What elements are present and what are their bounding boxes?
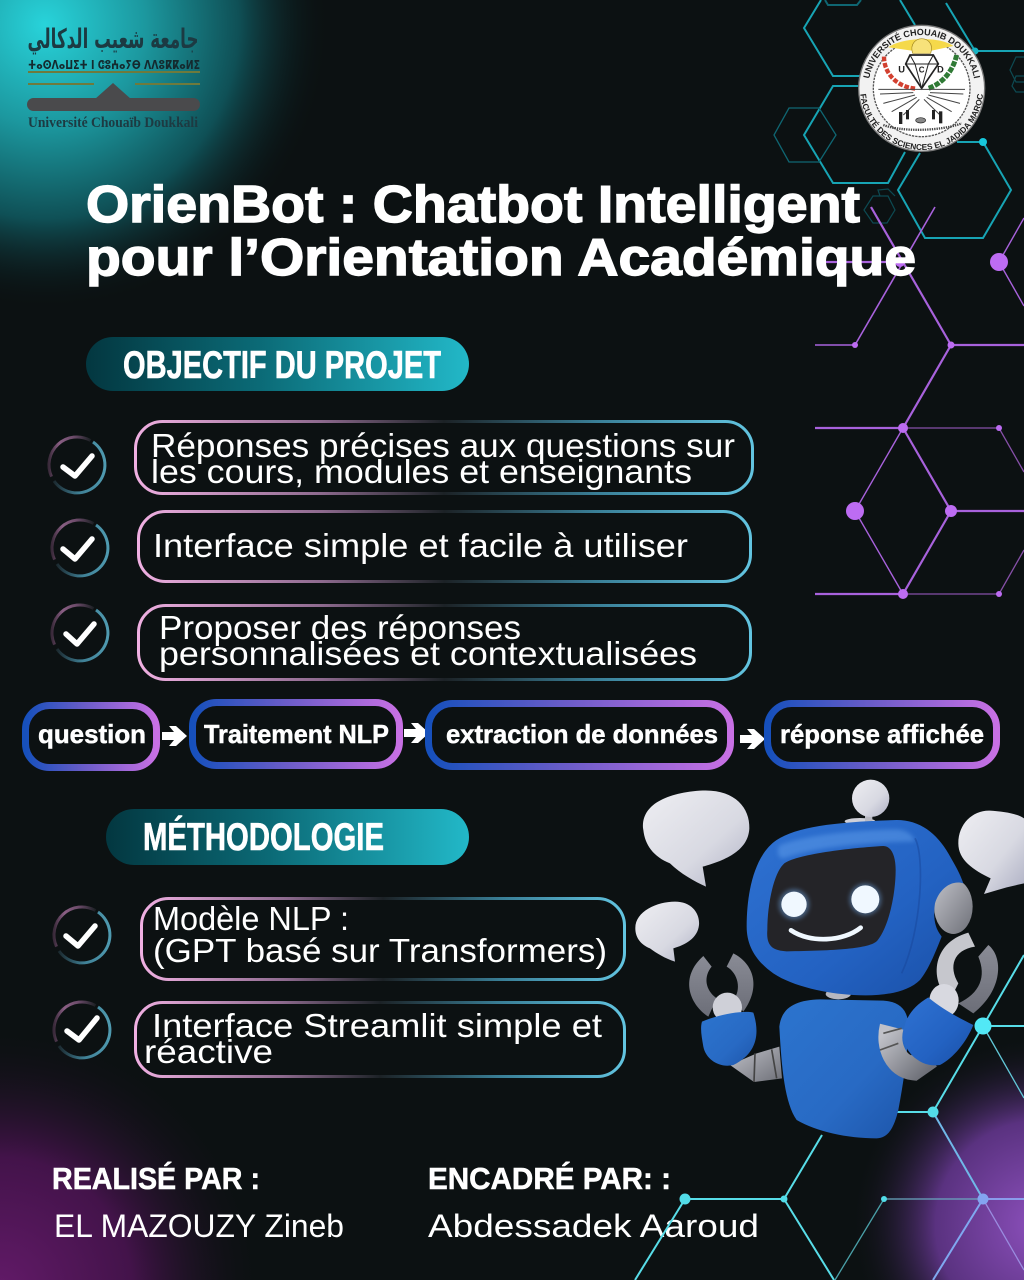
robot right arm and claw [880, 933, 998, 1068]
robot left arm and claw [689, 953, 782, 1082]
credit: réalisé par: EL MAZOUZY Zineb [54, 1208, 344, 1244]
objective 3: check and text box [52, 605, 750, 680]
credit: encadré par: Abdessadek Aaroud [428, 1208, 759, 1244]
process flow [26, 702, 996, 768]
seal: Faculté des Sciences El Jadida: UNIVERSITÉ CHOUAIB DOUKKALI [863, 28, 980, 78]
method 2: check and text box: Interface Streamlit simple et [152, 1007, 602, 1044]
credit: encadré par [428, 1161, 759, 1244]
arrow [740, 729, 765, 749]
robot ear [934, 879, 973, 934]
step: traitement NLP: Traitement NLP [204, 719, 389, 749]
credit: encadré par: ENCADRÉ PAR: : [428, 1161, 671, 1196]
objective 1: check and text box: Réponses précises aux questions sur [151, 427, 735, 464]
title [86, 176, 916, 287]
step: question: question [38, 719, 146, 749]
step: réponse affichée: réponse affichée [780, 719, 984, 749]
robot antenna [845, 780, 889, 825]
arrow [404, 723, 429, 743]
step: extraction de données: extraction de données [446, 719, 718, 749]
logo: Université Chouaïb Doukkali [27, 24, 200, 131]
objective 2: check and text box [52, 512, 751, 582]
hexagon network: right purple [815, 207, 1024, 599]
method 1: check and text box: (GPT basé sur Transformers) [153, 932, 607, 969]
speech bubble: small [635, 902, 699, 962]
objective 1: check and text box [49, 422, 753, 494]
robot head [747, 820, 963, 995]
credit: réalisé par [52, 1161, 344, 1244]
step: question [26, 706, 156, 768]
seal: Faculté des Sciences El Jadida [858, 24, 986, 152]
seal: Faculté des Sciences El Jadida: D [937, 65, 944, 75]
objective 3: check and text box: Proposer des réponses [159, 609, 521, 646]
heading pill: méthodologie: MÉTHODOLOGIE [143, 815, 384, 859]
step: traitement NLP [192, 702, 400, 766]
robot body [779, 999, 908, 1138]
robot mascot with speech bubbles [635, 780, 1024, 1138]
step: réponse affichée [768, 704, 996, 766]
seal: Faculté des Sciences El Jadida: FACULTÉ DES SCIENCES EL JADIDA MAROC [860, 94, 983, 150]
logo: Université Chouaïb Doukkali: Université Chouaïb Doukkali [28, 115, 198, 131]
objective 1: check and text box: les cours, modules et enseignants [151, 453, 692, 490]
hexagon network: top teal [774, 0, 1024, 238]
method 2: check and text box: réactive [144, 1033, 273, 1070]
method 2: check and text box [54, 1002, 624, 1076]
robot screen [767, 846, 896, 951]
logo: Université Chouaïb Doukkali: جامعة شعيب الدكالي [28, 24, 198, 55]
heading pill: méthodologie [106, 809, 469, 865]
logo: Université Chouaïb Doukkali: ⵜⴰⵙⴷⴰⵡⵉⵜ ⵏ ⵛⵓⵄⴰⵢⴱ ⴷⴷⵓⴽⴽⴰⵍⵉ [28, 58, 200, 72]
seal: Faculté des Sciences El Jadida: C [919, 66, 925, 75]
seal: Faculté des Sciences El Jadida: U [898, 65, 905, 75]
speech bubble: large [643, 790, 749, 887]
heading pill: objectif du projet [86, 337, 469, 391]
hexagon network: bottom cyan [635, 955, 1024, 1280]
method 1: check and text box: Modèle NLP : [153, 900, 349, 937]
speech bubble: right [958, 811, 1024, 894]
credit: réalisé par: REALISÉ PAR : [52, 1161, 260, 1196]
step: extraction de données [428, 704, 730, 766]
objective 3: check and text box: personnalisées et contextualisées [159, 635, 697, 672]
arrow [162, 726, 187, 746]
robot neck [826, 989, 851, 999]
title: OrienBot : Chatbot Intelligent [86, 176, 860, 234]
title: pour l’Orientation Académique [86, 229, 916, 287]
heading pill: objectif du projet: OBJECTIF DU PROJET [123, 344, 441, 387]
objective 2: check and text box: Interface simple et facile à utiliser [153, 527, 688, 564]
method 1: check and text box [54, 898, 624, 980]
